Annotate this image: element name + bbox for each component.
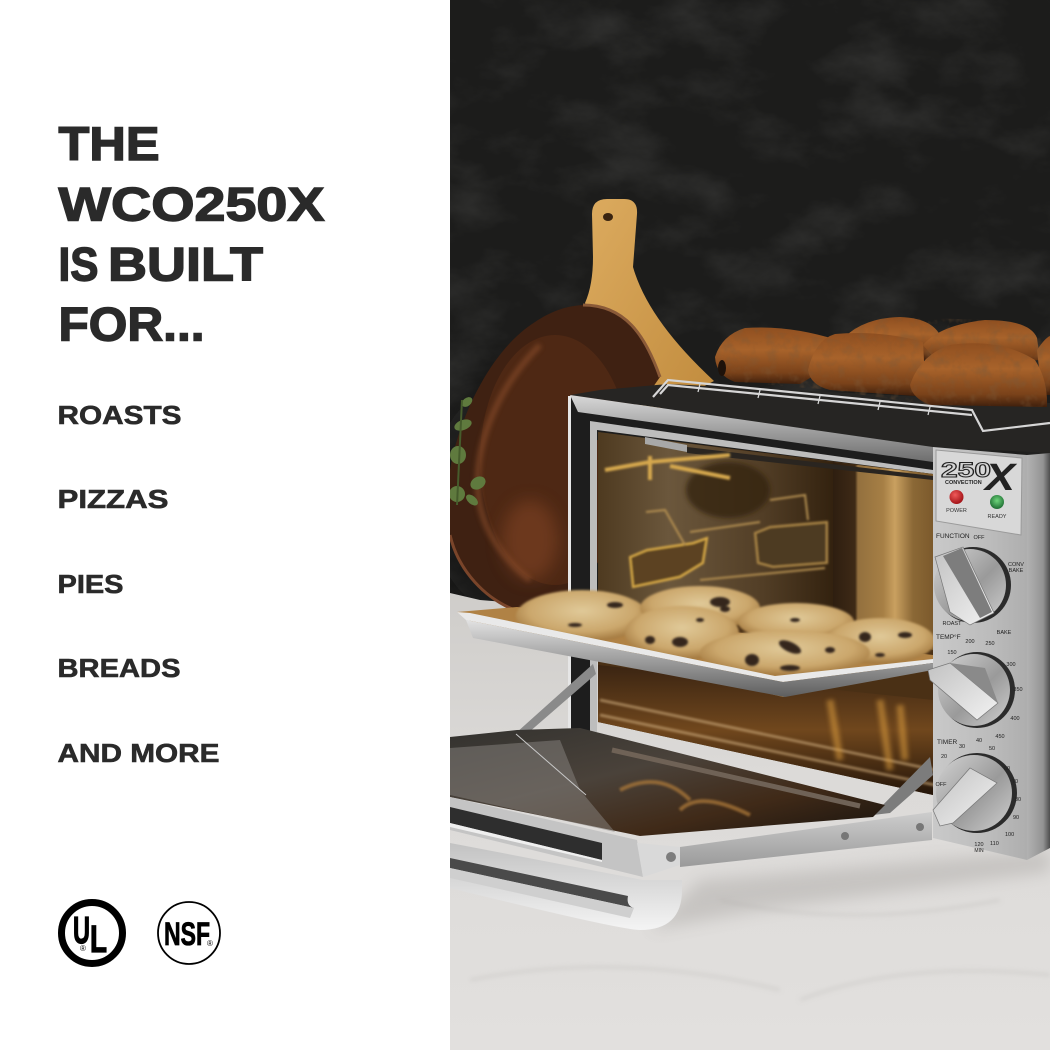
- oven front frame: [568, 395, 933, 732]
- dark plaster wall: [430, 0, 1050, 610]
- timer knob: OFF: [936, 782, 947, 788]
- power indicator: POWER: [946, 508, 967, 514]
- timer knob: [933, 738, 1021, 854]
- timer knob: 100: [1005, 832, 1014, 838]
- function knob: ROAST: [943, 621, 962, 627]
- baking tray with scones: [457, 586, 935, 697]
- door support arm left: [516, 664, 596, 733]
- food list: AND MORE: [58, 738, 220, 768]
- food list: [58, 400, 220, 768]
- cutting board: [585, 199, 714, 420]
- timer knob: MIN: [974, 848, 984, 854]
- copper pan: [450, 305, 660, 612]
- nameplate with logo and indicators: CONVECTION: [945, 480, 982, 486]
- door latch mechanism: [605, 455, 730, 480]
- croissants: [715, 317, 1050, 407]
- temperature knob: 250: [985, 641, 995, 647]
- timer knob: 80: [1015, 797, 1021, 803]
- photo: WCO250X oven with baked goods: [430, 0, 1050, 1050]
- title: IS: [58, 238, 98, 290]
- temperature knob: 350: [1013, 687, 1023, 693]
- icon: UL certification mark: U: [73, 910, 90, 952]
- fan grille: [686, 462, 770, 518]
- title: FOR...: [58, 298, 204, 350]
- oven top surface: [570, 384, 1050, 453]
- icon: UL certification mark: ®: [80, 944, 86, 953]
- temperature knob: 150: [947, 650, 957, 656]
- control panel side: [1027, 453, 1050, 860]
- function knob: CONV: [1008, 562, 1024, 568]
- oven interior: [598, 432, 935, 795]
- timer knob: 110: [990, 841, 999, 847]
- timer knob: 40: [976, 738, 982, 744]
- timer knob: TIMER: [937, 739, 958, 746]
- icon: NSF certification mark: ®: [207, 939, 213, 948]
- marble countertop: [450, 593, 1050, 1050]
- ready indicator: READY: [988, 514, 1007, 520]
- icon: UL certification mark: L: [90, 919, 107, 961]
- oven door glass: [450, 728, 885, 836]
- temperature knob: 200: [965, 639, 975, 645]
- door shadow on counter: [650, 850, 1050, 930]
- title: THE: [58, 117, 160, 170]
- function knob: BAKE: [997, 630, 1012, 636]
- temperature knob: [928, 633, 1023, 740]
- temperature knob: 450: [995, 734, 1005, 740]
- food list: BREADS: [58, 653, 180, 683]
- temperature knob: TEMP°F: [936, 633, 961, 641]
- timer knob: 50: [989, 746, 995, 752]
- timer knob: 20: [941, 754, 947, 760]
- title: BUILT: [108, 238, 263, 290]
- rack brackets: [630, 495, 827, 587]
- icon: NSF certification mark: NSF: [164, 916, 210, 952]
- control panel face: [933, 447, 1027, 860]
- timer knob: 70: [1012, 779, 1018, 785]
- icon: UL certification mark: [62, 902, 122, 964]
- door frame side bar with screws: [680, 812, 932, 867]
- nameplate with logo and indicators: [936, 450, 1022, 535]
- title: WCO250X: [58, 178, 324, 230]
- food list: PIZZAS: [58, 484, 168, 514]
- door support arm right: [873, 757, 933, 815]
- timer knob: 120: [974, 842, 984, 848]
- function knob: [934, 533, 1024, 636]
- door handle: [450, 843, 682, 930]
- temperature knob: 400: [1010, 716, 1020, 722]
- heating element tube: [645, 437, 933, 480]
- panel: white text column: [0, 0, 450, 1050]
- function knob: FUNCTION: [936, 533, 970, 540]
- nameplate with logo and indicators: 250: [941, 459, 991, 482]
- food list: ROASTS: [58, 400, 182, 430]
- icon: NSF certification mark: [158, 902, 220, 964]
- scones: [516, 586, 935, 676]
- nameplate with logo and indicators: X: [983, 457, 1018, 499]
- door front frame: [450, 797, 680, 877]
- food list: PIES: [58, 569, 124, 599]
- title: [58, 117, 324, 350]
- timer knob: 90: [1013, 815, 1019, 821]
- timer knob: 30: [959, 744, 965, 750]
- temperature knob: 300: [1006, 662, 1016, 668]
- function knob: BAKE: [1009, 568, 1024, 574]
- function knob: OFF: [974, 535, 985, 541]
- timer knob: 60: [1004, 766, 1010, 772]
- cooling rack on top of oven: [653, 380, 1050, 431]
- tray rim: [457, 612, 933, 682]
- herb sprig: [450, 397, 486, 506]
